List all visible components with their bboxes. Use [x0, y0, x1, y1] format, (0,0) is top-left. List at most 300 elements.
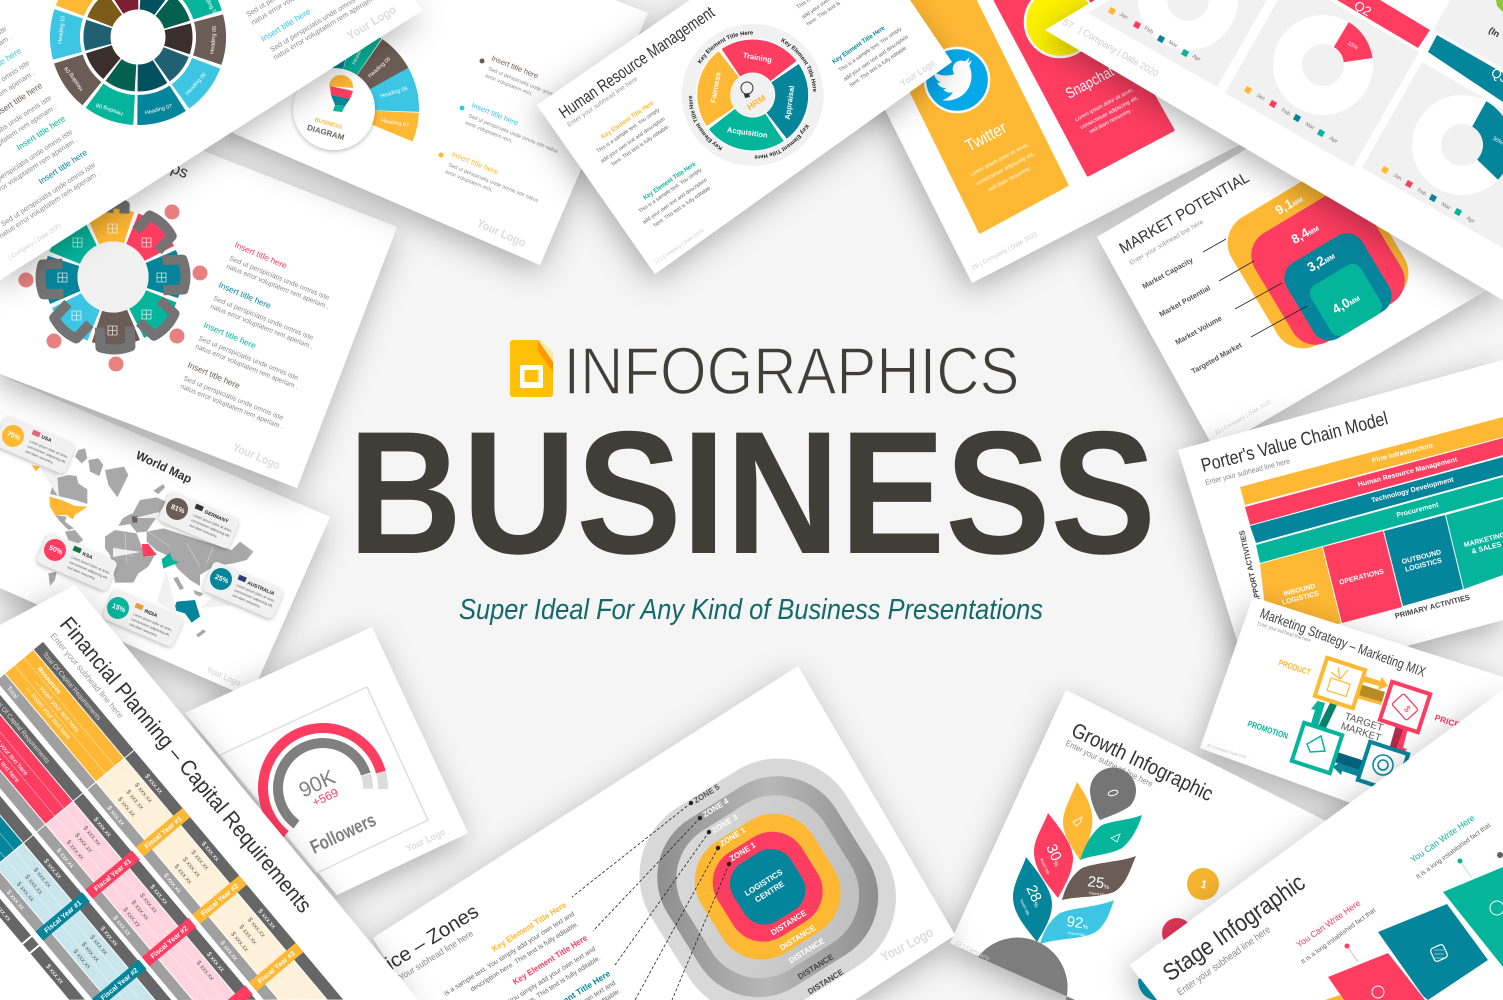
slide: business diagram [200, 0, 648, 265]
list items: Insert title here [470, 101, 520, 127]
footer: 32 | Company | Date 2020 [1207, 743, 1247, 760]
slide: world map [0, 375, 330, 698]
callout: USA: sed diam nonummy. [25, 449, 54, 465]
India highlighted [162, 553, 179, 569]
slide: teamwork round table [0, 130, 397, 488]
text: teal item [209, 280, 314, 351]
text: red item [225, 240, 330, 311]
panel: chart 4 [1433, 0, 1503, 68]
zone labels [692, 782, 758, 863]
Saudi Arabia highlighted [142, 544, 157, 557]
text: yellow key element: Key Element Title Here [600, 100, 656, 141]
HRM wheel: Key Element Title Here [781, 38, 816, 92]
callout: India [102, 570, 184, 648]
table group: yellow: $ xxx.xx [173, 863, 193, 886]
left teal fragment [1138, 978, 1157, 1000]
nested market squares: 9,1MM [1272, 190, 1305, 218]
card: snapchat: consectetuer adipiscing elit, [1079, 95, 1140, 131]
fan labels: Heading 07 [381, 118, 409, 129]
panel: chart 2: 15% [1346, 41, 1359, 52]
table group: yellow: $ xxx.xx [238, 924, 258, 947]
list items: Sed ut perspiciatis unde omnis iste natus [487, 66, 579, 108]
table group: teal: $ xxx.xx [15, 881, 36, 904]
callout: USA: 75% [6, 431, 22, 443]
table group: yellow: $ xxx.xx [105, 805, 126, 828]
step circle 1: 1 [1199, 879, 1208, 892]
fan labels: Heading 05 [367, 56, 392, 79]
callout: KSA: 50% [48, 545, 64, 557]
text: yellow key element: here. This text is fully editable. [611, 124, 671, 168]
text: brown item: Sed ut perspiciatis unde omnis iste [182, 375, 284, 422]
callout: Australia: 25% [214, 574, 230, 586]
callout: Germany: GERMANY [203, 509, 230, 525]
Australia highlighted [173, 600, 200, 623]
table group: yellow: $ xxx.xx [200, 840, 221, 863]
market labels: Market Volume [1174, 314, 1223, 347]
your logo: Your Logo [205, 665, 243, 688]
left text list: Insert title here [14, 113, 67, 152]
inner frame [220, 687, 428, 873]
slide: social media cards [830, 0, 1243, 283]
slide: porter's value chain [1178, 360, 1503, 650]
text: yellow key element [596, 100, 671, 168]
subtitle: Enter your subhead line here [1256, 621, 1311, 644]
icon box: price: $ [1402, 704, 1413, 714]
inner wheel ring [80, 0, 196, 95]
callout: Australia: sed diam nonummy. [232, 593, 261, 609]
table group: red: $ xxx.xx [92, 816, 113, 839]
text: green item: Sed ut perspiciatis unde omnis iste [197, 335, 299, 382]
label: followers: Followers [307, 810, 380, 859]
card: snapchat [995, 0, 1173, 175]
zone labels: ZONE 1 [728, 840, 758, 863]
table group: yellow: Total Of Capital Requirements [41, 651, 102, 722]
text: yellow key element: Key Element Title Here [490, 900, 568, 954]
subtitle: Your subhead line here [397, 928, 475, 982]
fan labels [351, 38, 409, 129]
slide: quarterly charts [1045, 0, 1503, 300]
wheel labels: Heading 09 [64, 65, 85, 92]
primary activity columns: OPERATIONS [1339, 568, 1385, 587]
followers gauge: +569 [310, 785, 341, 809]
table group: teal: $ xxx.xx [5, 889, 26, 912]
zone labels: ZONE 4 [701, 796, 731, 819]
text: brown item: Insert title here [186, 360, 242, 391]
icon box: promotion [1292, 723, 1342, 773]
connecting arrows [1310, 675, 1408, 778]
text: red item: Sed ut perspiciatis unde omnis iste [228, 255, 330, 302]
icon: google slides [510, 340, 553, 397]
tagline: Super Ideal For Any Kind of Business Presentations [459, 594, 1043, 626]
left text list: natus error voluptatem rem aperiam . [0, 168, 101, 240]
leader lines [1203, 239, 1307, 337]
slide: growth infographic [950, 690, 1503, 1000]
table group: teal: Fiscal Year #1 [43, 900, 83, 935]
text: teal item: natus error voluptatem rem aperiam . [209, 303, 314, 351]
slide: stage infographic [1130, 690, 1503, 1000]
table group: teal: $ xxx.xx [80, 941, 101, 964]
market labels [1141, 255, 1244, 376]
HRM wheel [682, 24, 824, 166]
HRM wheel: Key Element Title Here [689, 96, 722, 151]
panel: chart 3: Feb [1416, 188, 1427, 197]
table group: yellow: $ xxx.xx [256, 908, 277, 931]
market labels: Market Potential [1158, 283, 1212, 319]
distance labels [769, 908, 846, 996]
leaf plant: Insert title [1019, 898, 1031, 917]
text: brown item: natus error voluptatem rem aperiam . [179, 383, 284, 431]
table group: red [0, 684, 257, 1000]
wheel labels [57, 0, 218, 117]
badge: business diagram: BUSINESS [314, 117, 343, 131]
leaf plant [1013, 768, 1142, 944]
center label: target market [1339, 711, 1384, 744]
table group: red: Fiscal Year #1 [93, 858, 133, 893]
title: Marketing Strategy – Marketing MIX [1258, 605, 1428, 680]
leaf plant: 92% [1065, 913, 1090, 933]
your logo: Your Logo [899, 58, 938, 89]
title: Stage Infographic [1158, 869, 1310, 987]
text: teal item: Sed ut perspiciatis unde omnis iste [212, 295, 314, 342]
footer: 23 | Company | Date 2020 [1214, 400, 1272, 437]
callout: USA: Lorem ipsum dolor sit amet, [29, 439, 69, 459]
text: green item: natus error voluptatem rem aperiam . [194, 343, 299, 391]
fan labels: Heading 06 [380, 86, 408, 100]
wheel labels: Heading 06 [185, 72, 208, 97]
card: snapchat: Snapchat [1063, 63, 1117, 103]
stage 2 text: It is a long established fact that [1415, 822, 1492, 881]
right text list: Insert title here [259, 6, 312, 44]
primary activity columns [1260, 499, 1503, 650]
panel: chart 3: Apr [1465, 216, 1476, 225]
table group: yellow: $ xxx.xx [246, 916, 267, 940]
table group: yellow: $ xxx.xx [143, 773, 164, 796]
subtitle: Enter your subhead line here [566, 75, 639, 129]
stage 2 text: You Can Write Here [1408, 813, 1476, 865]
callout: India: 15% [111, 603, 127, 615]
card: snapchat: Lorem ipsum dolor sit amet, [1074, 87, 1135, 123]
HRM wheel: HRM [745, 93, 768, 112]
text: yellow key element: is a sample text. You simply add your own text and [443, 911, 576, 997]
panel: chart 1: Feb [1143, 26, 1154, 35]
table group: bottom row [0, 768, 86, 1000]
brown marker [1497, 852, 1503, 858]
panel: chart 3: Mar [1440, 202, 1451, 212]
text: red key element: Key Element Title Here [511, 933, 589, 987]
HRM wheel: Training [742, 51, 773, 65]
table group: red: $ xxx.xx [121, 906, 142, 929]
subtitle: Enter your subhead line here [48, 631, 126, 720]
your logo: Your Logo [344, 2, 399, 43]
slide: human resource management [525, 0, 958, 291]
heading: infographics: INFOGRAPHICS [564, 334, 1020, 409]
primary activity columns: & SALES [1471, 541, 1503, 556]
nested market squares [1216, 156, 1420, 360]
table group: red: Fiscal Year #2 [150, 925, 190, 960]
callout: Germany: Lorem ipsum dolor sit amet, [193, 513, 233, 533]
axis label: primary activities: PRIMARY ACTIVITIES [1394, 593, 1471, 621]
zones diagram [572, 758, 896, 1000]
distance labels: DISTANCE [796, 952, 836, 981]
left text list [0, 24, 101, 240]
primary activity columns: LOGISTICS [1404, 557, 1443, 574]
title: ice – Zones [382, 901, 483, 975]
list items: Insert title here [450, 150, 500, 176]
list items: Insert title here [490, 54, 540, 80]
icon box: price [1380, 682, 1430, 732]
nested market squares: 3,2MM [1304, 247, 1337, 275]
table group: teal: $ xxx.xx [88, 934, 109, 957]
callout: Australia: AUSTRALIA [246, 580, 276, 597]
slide: financial planning [0, 585, 418, 1000]
card: twitter: consectetuer adipiscing elit, [975, 151, 1036, 187]
table group: red: $ xxx.xx [205, 951, 226, 974]
subtitle: Enter your subhead line here [1204, 456, 1291, 487]
subtitle: Enter your subhead line here [1128, 218, 1205, 267]
zone labels: ZONE 5 [692, 782, 722, 805]
label: promotion: PROMOTION [1246, 718, 1289, 741]
slide: service zones [373, 666, 955, 1000]
stage blocks [1325, 867, 1503, 1000]
centre label: CENTRE [753, 879, 787, 904]
table group: teal: $ xxx.xx [32, 866, 53, 890]
badge: business diagram: DIAGRAM [306, 123, 346, 142]
nested market squares: 8,4MM [1288, 219, 1321, 247]
round table diagram [18, 203, 208, 372]
nested market squares: 4,0MM [1329, 289, 1362, 317]
panel: chart 2: Apr [1328, 136, 1339, 145]
text: red item: natus error voluptatem rem aperiam . [225, 263, 330, 311]
table group: yellow: Total [5, 685, 19, 701]
list items: error voluptatem rem. [464, 120, 513, 145]
panel: chart 2: Mar [1304, 122, 1315, 132]
list items: error voluptatem rem. [484, 73, 533, 98]
table group: red: $ xxx.xx [130, 899, 151, 922]
table group: yellow: $ xxx.xx [189, 849, 210, 872]
table group: teal: $ xxx.xx [23, 874, 44, 897]
wheel labels: Heading 10 [57, 16, 67, 44]
table group: red: $ xxx.xx [195, 960, 216, 983]
text: teal key element [831, 25, 910, 89]
slide: quarterly charts: | Company | Date 2020 [1076, 25, 1160, 80]
distance labels: DISTANCE [769, 908, 809, 937]
label: price: PRICE [1433, 712, 1461, 730]
panel: chart 3 [1362, 62, 1503, 248]
distance labels: DISTANCE [778, 923, 818, 952]
table group: yellow: $ xxx.xx [229, 931, 250, 954]
outer wheel ring [35, 0, 241, 140]
zone labels: ZONE 1 [718, 825, 748, 848]
table group: yellow: $ xxx.xx [162, 872, 183, 895]
table group: yellow: — Insert your text here [32, 679, 80, 734]
callout: KSA: consectetuer adipiscing elit, [69, 560, 109, 580]
text: yellow key element: description here. This text is fully editable. [469, 921, 580, 993]
leaf plant: 28% [1022, 883, 1047, 910]
panel: chart 1 [1088, 0, 1267, 87]
text: brown item [179, 360, 284, 431]
HRM wheel: Fairness [708, 72, 723, 104]
table group: bottom row: $ xxx.xx [44, 963, 65, 986]
footer: | Company | Date 2020 [8, 223, 63, 262]
HRM wheel: Appraisal [783, 85, 796, 120]
rotated table content [0, 612, 376, 1000]
table group: yellow: $ xxx.xx [133, 782, 154, 805]
support activity bands: Firm Infrastructure [1371, 442, 1434, 465]
text: green key element [638, 161, 713, 229]
callout: Australia [200, 560, 284, 620]
label fragment: (In [1487, 25, 1502, 39]
callout: India: INDIA [143, 608, 158, 619]
callout: India: sed diam nonummy. [129, 622, 158, 638]
text: yellow key element: add your own text and description [600, 116, 667, 165]
table group: yellow: Fiscal Year #1 [144, 815, 184, 851]
callout: India: consectetuer adipiscing elit, [131, 617, 171, 637]
slide: marketing mix [1200, 597, 1503, 830]
text: green key element: This is a sample text. You simply [638, 167, 703, 215]
support activity bands: Technology Development [1371, 476, 1455, 505]
fan segments [247, 22, 421, 196]
callout: USA: consectetuer adipiscing elit, [27, 444, 67, 464]
list items: Sed ut perspiciatis unde omnis iste natus [467, 113, 559, 155]
header band: Q3 [1428, 35, 1503, 102]
plant base semicircle [978, 938, 1075, 1000]
callout: Australia: consectetuer adipiscing elit, [234, 588, 274, 608]
step circle 2 [1162, 918, 1192, 948]
list items: error voluptatem rem. [444, 169, 493, 194]
table group: yellow: $ xxx.xx [116, 796, 137, 819]
text: teal item: Insert title here [217, 280, 273, 311]
panel: chart 2: Feb [1280, 108, 1291, 117]
callout: KSA: sed diam nonummy. [67, 565, 96, 581]
callout: Germany: consectetuer adipiscing elit, [191, 518, 231, 538]
Germany highlighted [132, 516, 137, 523]
primary activity columns: LOGISTICS [1281, 590, 1320, 607]
title: Porter's Value Chain Model [1199, 408, 1390, 477]
HRM wheel: Key Element Title Here [754, 124, 810, 159]
your logo: Your Logo [405, 827, 447, 855]
center label: target market: MARKET [1339, 721, 1382, 744]
table group: yellow: Fiscal Year #3 [257, 950, 297, 985]
HRM wheel: Acquisition [726, 125, 769, 140]
fan labels: Heading 04 [351, 38, 368, 66]
left text list: Sed ut perspiciatis unde omnis iste [0, 160, 97, 228]
icon box: product [1315, 658, 1365, 708]
card: snapchat: sed diam nonummy . [1088, 107, 1135, 135]
wheel labels: Heading 05 [210, 26, 218, 54]
zone labels: ZONE 3 [710, 812, 740, 835]
badge: business diagram [293, 68, 375, 150]
panel: chart 1: Apr [1191, 54, 1202, 63]
footer: 32 | Company [954, 940, 990, 962]
table group: teal [0, 726, 172, 1000]
distance labels: DISTANCE [787, 936, 827, 965]
table group: red: $ xxx.xx [65, 839, 86, 862]
world map title: World Map [134, 448, 194, 486]
HRM wheel: Key Element Title Here [698, 31, 753, 64]
card: twitter [866, 0, 1067, 232]
slide: followers [185, 627, 468, 895]
slide: market potential [1097, 147, 1487, 450]
panel: chart 2: Jan [1255, 93, 1266, 102]
callout: India: Lorem ipsum dolor sit amet, [133, 612, 173, 632]
leader lines with dots [572, 803, 729, 1000]
slide title fragment: ps [169, 160, 191, 182]
callout: Germany: 81% [170, 504, 186, 516]
axis label: support activities: SUPPORT ACTIVITIES [1237, 530, 1264, 609]
stage 1 text: You Can Write Here [1294, 898, 1362, 950]
primary activity columns: OUTBOUND [1401, 549, 1442, 566]
text: green item: Insert title here [202, 320, 258, 351]
table group: red: $ xxx.xx [73, 832, 94, 855]
leaf plant: 25% [1086, 873, 1111, 893]
distance labels: DISTANCE [806, 967, 846, 996]
subtitle: Enter your subhead line here [1064, 738, 1155, 789]
market labels: Market Capacity [1141, 255, 1195, 291]
text: teal key element: add your own text and description [843, 34, 910, 83]
text: yellow key element: This is a sample text. You simply [596, 107, 661, 155]
header band: Q2 [1337, 0, 1430, 48]
callout: Germany [135, 490, 240, 550]
wheel labels: Heading 08 [95, 101, 124, 117]
text: teal key element: This is a sample text. You simply [838, 26, 903, 74]
followers gauge: 90K [295, 766, 339, 802]
wheel labels: Heading 07 [144, 103, 173, 117]
table group: red: $ xxx.xx [138, 892, 159, 915]
callout: KSA: KSA [81, 551, 94, 561]
your logo: Your Logo [475, 216, 528, 250]
stage 1 text: It is a long established fact that [1300, 907, 1377, 966]
table group: red: $ xxx.xx [148, 883, 169, 907]
support activity bands [1240, 417, 1503, 563]
left text list: Insert title here [36, 147, 89, 186]
card: twitter: sed diam nonummy . [987, 165, 1034, 193]
your logo: Your Logo [231, 440, 282, 472]
list items [438, 54, 579, 204]
table group: yellow: Resources [36, 666, 63, 696]
text: green key element: here. This text is fully editable. [653, 185, 713, 229]
table group: teal: $ xxx.xx [99, 925, 120, 948]
step circle 1 [1187, 868, 1219, 900]
footer: 57 [1060, 17, 1075, 32]
text: red item: Insert title here [233, 240, 289, 271]
title: Financial Planning – Capital Requirements [55, 612, 317, 918]
your logo: Your Logo [878, 924, 936, 965]
text: green key element: Key Element Title Here [642, 161, 698, 202]
panel: chart 3: Jan [1392, 173, 1403, 182]
table group: yellow: $ xxx.xx [124, 789, 145, 812]
table group: red: $ xxx.xx [55, 847, 76, 870]
slide: heading wheel [0, 0, 423, 280]
callout: Germany: sed diam nonummy. [189, 523, 218, 539]
icon box: place [1358, 742, 1408, 792]
heading: business: BUSINESS [348, 396, 1156, 591]
text: green item [194, 320, 299, 391]
panel: chart 1: Mar [1167, 40, 1178, 50]
table group: teal: $ xxx.xx [71, 948, 92, 971]
followers gauge [239, 704, 407, 872]
subtitle: Enter your subhead line here [1175, 924, 1273, 998]
support activity bands: Human Resource Management [1357, 456, 1459, 489]
leaf plant: Insert title [1039, 857, 1051, 876]
table group: yellow: — Insert your text here [24, 686, 72, 741]
market labels: Targeted Market [1190, 340, 1244, 376]
table group: red: $ xxx.xx [111, 915, 132, 938]
label: product: PRODUCT [1277, 657, 1312, 677]
card: twitter: Twitter [962, 118, 1010, 156]
list items: Sed ut perspiciatis unde omnis iste natus [447, 162, 539, 204]
panel: chart 1: Jan [1118, 12, 1129, 21]
text: red key element: here. This text is [806, 0, 842, 28]
